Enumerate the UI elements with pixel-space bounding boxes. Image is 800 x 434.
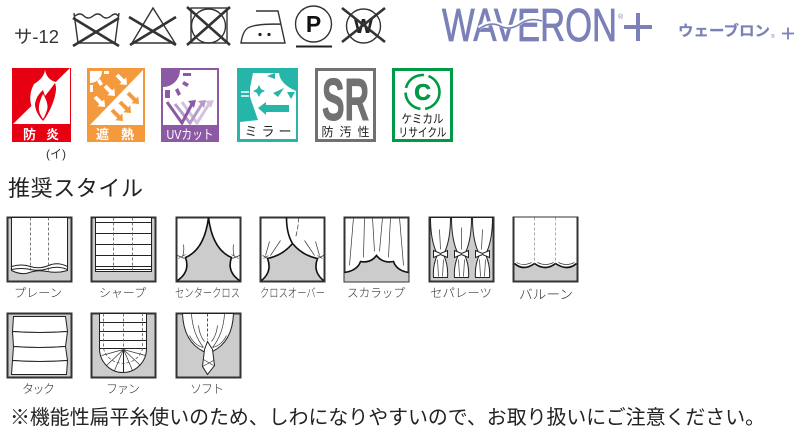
- badge: chemical recycle: リサイクル: [398, 126, 446, 140]
- label: center cross: センタークロス: [175, 286, 240, 300]
- logo: katakana name: ®: [771, 33, 775, 40]
- label: soft: ソフト: [190, 382, 224, 396]
- icon: dry clean P: [296, 6, 332, 48]
- badge: flame retardant: 防: [23, 127, 36, 142]
- badge: UV cut: [161, 68, 219, 142]
- badge note: (イ): [46, 147, 66, 161]
- badge: heat shield: 熱: [121, 127, 134, 142]
- badge: chemical recycle: ケミカル: [402, 112, 444, 126]
- footnote: ※機能性扁平糸使いのため、しわになりやすいので、お取り扱いにご注意ください。: [10, 406, 765, 429]
- label: fan: ファン: [106, 382, 140, 396]
- label: tuck: タック: [22, 382, 55, 396]
- label: balloon: バルーン: [519, 287, 573, 302]
- badge: soil resistant SR: 防汚性: [322, 124, 370, 139]
- badge: soil resistant SR: [316, 67, 374, 140]
- style: center cross: [176, 218, 240, 282]
- icon: dry clean P: P: [306, 11, 321, 37]
- logo: katakana name: [678, 22, 794, 40]
- icon: no bleach: [129, 8, 176, 45]
- label: scallop: スカラップ: [347, 286, 405, 300]
- badge: heat shield: [87, 68, 145, 142]
- style: scallop: [344, 218, 408, 282]
- label: cross over: クロスオーバー: [260, 286, 325, 300]
- icon: no wet clean W: W: [354, 16, 373, 38]
- badge: UV cut: UVカット: [166, 127, 214, 142]
- logo: katakana name: ウェーブロン: [678, 22, 770, 40]
- badge: flame retardant: 炎: [46, 127, 59, 142]
- style: tuck: [8, 314, 72, 378]
- label: plain: プレーン: [14, 286, 62, 300]
- icon: no tumble dry: [187, 7, 230, 45]
- badge: mirror: [237, 68, 298, 142]
- badge: heat shield: 遮: [96, 127, 109, 142]
- label: separates: セパレーツ: [430, 286, 492, 300]
- icon: no wet clean W: [342, 8, 385, 43]
- badge: chemical recycle: [394, 70, 452, 140]
- style: balloon: [514, 218, 578, 282]
- badge: soil resistant SR: SR: [322, 67, 369, 133]
- badge: flame retardant: [12, 68, 71, 142]
- badge: mirror: ミラー: [244, 124, 292, 139]
- style: sharp: [92, 218, 156, 282]
- label: sharp: シャープ: [99, 286, 146, 300]
- icon: no washing: [73, 13, 119, 46]
- style: separates: [430, 218, 494, 282]
- style: soft: [176, 314, 240, 378]
- badge: chemical recycle: C: [414, 79, 431, 105]
- logo: WAVERON+: WAVERON: [442, 0, 617, 51]
- style: plain: [8, 218, 72, 282]
- style: cross over: [260, 218, 324, 282]
- icon: iron low heat: [241, 11, 285, 43]
- logo: WAVERON+: ®: [618, 13, 624, 21]
- product code: サ-12: [14, 27, 59, 47]
- style: fan: [92, 314, 156, 378]
- heading: recommended styles: 推奨スタイル: [8, 176, 143, 201]
